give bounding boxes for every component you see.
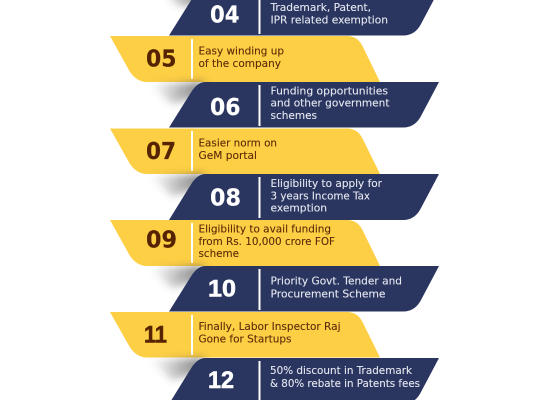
ribbon 04: IPR related exemption — [270, 15, 388, 27]
ribbon 06: schemes — [270, 110, 317, 122]
ribbon 06: Funding opportunities — [270, 85, 388, 97]
ribbon 08 — [150, 174, 439, 220]
ribbon 12: 12 — [208, 367, 234, 394]
ribbon 10: Priority Govt. Tender and — [270, 276, 402, 288]
ribbon 08: 3 years Income Tax — [270, 191, 370, 203]
ribbon 06 — [150, 82, 439, 128]
ribbon 07: 07 — [146, 137, 176, 165]
ribbon 05: Easy winding up — [198, 46, 284, 58]
ribbon 07: Easier norm on — [198, 137, 277, 149]
ribbon 08: 08 — [210, 183, 241, 211]
ribbon 05: of the company — [198, 58, 281, 70]
ribbon 12 — [150, 358, 439, 400]
ribbon 04: 04 — [210, 1, 240, 29]
ribbon 05: 05 — [146, 45, 176, 73]
ribbon 10: 10 — [208, 276, 236, 303]
ribbon 04: Trademark, Patent, — [269, 2, 371, 14]
ribbon 07: GeM portal — [198, 150, 257, 162]
ribbon 12: & 80% rebate in Patents fees — [270, 378, 420, 390]
ribbon 09: from Rs. 10,000 crore FOF — [198, 236, 335, 248]
ribbon 09: scheme — [198, 248, 239, 260]
ribbon 06: 06 — [210, 93, 240, 121]
ribbon 05 — [110, 36, 380, 82]
ribbon 09: 09 — [146, 226, 177, 254]
ribbon 11: Gone for Startups — [198, 334, 292, 346]
ribbon 11: Finally, Labor Inspector Raj — [198, 321, 340, 333]
ribbon 10: Procurement Scheme — [270, 289, 386, 301]
ribbon 07 — [110, 128, 380, 174]
ribbon 11 — [110, 312, 380, 358]
ribbon 08: exemption — [270, 203, 327, 215]
ribbon 08: Eligibility to apply for — [270, 178, 383, 190]
ribbon 11: 11 — [144, 321, 167, 348]
ribbon 12: 50% discount in Trademark — [270, 365, 412, 377]
ribbon 04 — [160, 0, 439, 36]
ribbon 06: and other government — [270, 98, 390, 110]
ribbon 10 — [150, 266, 439, 312]
ribbon 09: Eligibility to avail funding — [198, 223, 331, 235]
ribbon 09 — [110, 220, 380, 266]
